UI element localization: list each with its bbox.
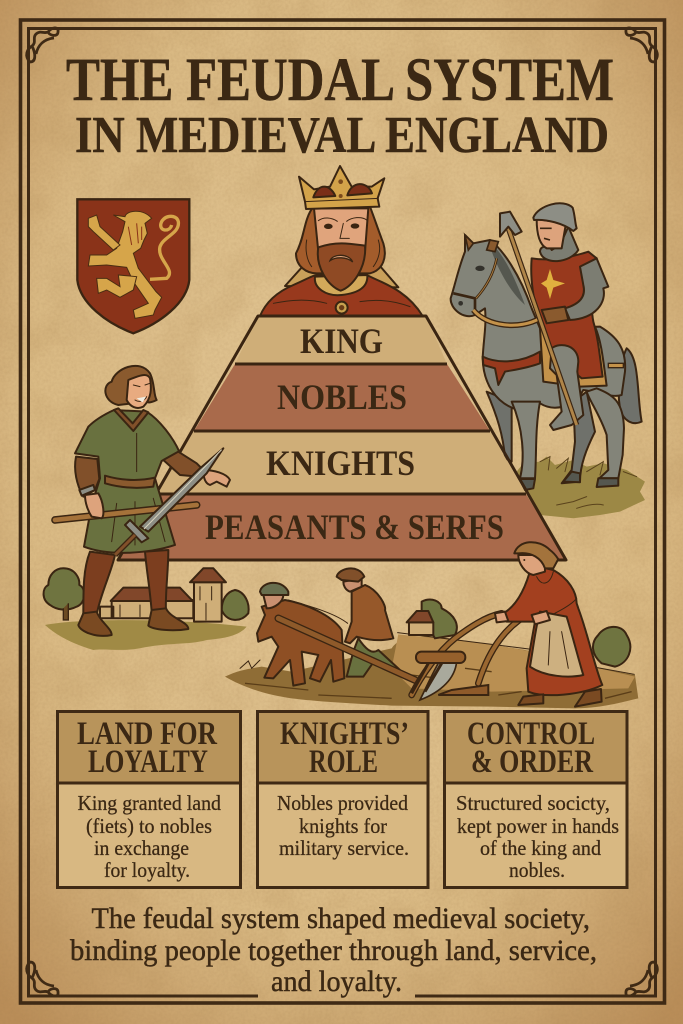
illustration: peasants ploughing xyxy=(225,542,638,708)
tier: peasants and serfs xyxy=(118,494,566,560)
body text: military service. xyxy=(279,836,409,860)
body text: Structured socicty, xyxy=(456,791,610,815)
panel: land for loyalty xyxy=(58,712,240,888)
illustration: village and squire with sword xyxy=(44,366,249,650)
title xyxy=(66,47,614,164)
tier: nobles xyxy=(194,364,490,431)
tier: king: KING xyxy=(300,321,383,361)
heading: LAND FOR xyxy=(77,716,218,752)
body text: nobles. xyxy=(509,858,565,882)
panel: control and order xyxy=(444,712,627,888)
yoke beam xyxy=(278,618,415,680)
body text: Nobles provided xyxy=(277,791,408,815)
body text: of the king and xyxy=(480,836,601,860)
tier: nobles: NOBLES xyxy=(277,377,407,417)
closing statement: and loyalty. xyxy=(271,965,402,998)
body text: (fiets) to nobles xyxy=(86,814,212,838)
plough xyxy=(412,612,533,700)
ground under horse xyxy=(517,457,645,518)
illustration: king xyxy=(260,166,423,316)
body text xyxy=(277,791,409,860)
tier: knights: KNIGHTS xyxy=(266,443,415,483)
body text: King granted land xyxy=(78,791,221,815)
pyramid of feudal hierarchy xyxy=(118,316,566,560)
ox xyxy=(257,600,344,686)
field ground xyxy=(225,636,638,708)
illustration: knight on horse xyxy=(451,203,645,518)
tier: peasants and serfs: PEASANTS & SERFS xyxy=(205,507,504,547)
heading: LOYALTY xyxy=(88,744,208,780)
village trees and houses xyxy=(44,568,249,622)
closing statement xyxy=(70,902,597,998)
closing statement: The feudal system shaped medieval society, xyxy=(92,902,590,935)
heading: & ORDER xyxy=(471,744,594,780)
body text: for loyalty. xyxy=(104,858,190,882)
body text: knights for xyxy=(299,814,387,838)
heading: CONTROL xyxy=(467,716,595,752)
icon: heraldic shield with lion xyxy=(77,199,189,333)
closing statement: binding people together through land, service, xyxy=(70,934,597,967)
ground under village xyxy=(45,620,247,650)
body text: in exchange xyxy=(94,836,189,860)
heading xyxy=(467,716,595,780)
heading xyxy=(77,716,218,780)
body text: kept power in hands xyxy=(457,814,619,838)
heading: KNIGHTS’ xyxy=(280,716,409,752)
tier: king xyxy=(235,316,447,364)
heading: ROLE xyxy=(309,744,378,780)
body text xyxy=(456,791,619,882)
distant cottage and bushes xyxy=(407,600,630,667)
panel: knights' role xyxy=(258,712,428,888)
title: IN MEDIEVAL ENGLAND xyxy=(75,107,609,164)
ploughman xyxy=(347,638,400,677)
tier: knights xyxy=(155,431,526,494)
peasant woman xyxy=(495,542,602,707)
heading xyxy=(280,716,409,780)
body text xyxy=(78,791,221,882)
